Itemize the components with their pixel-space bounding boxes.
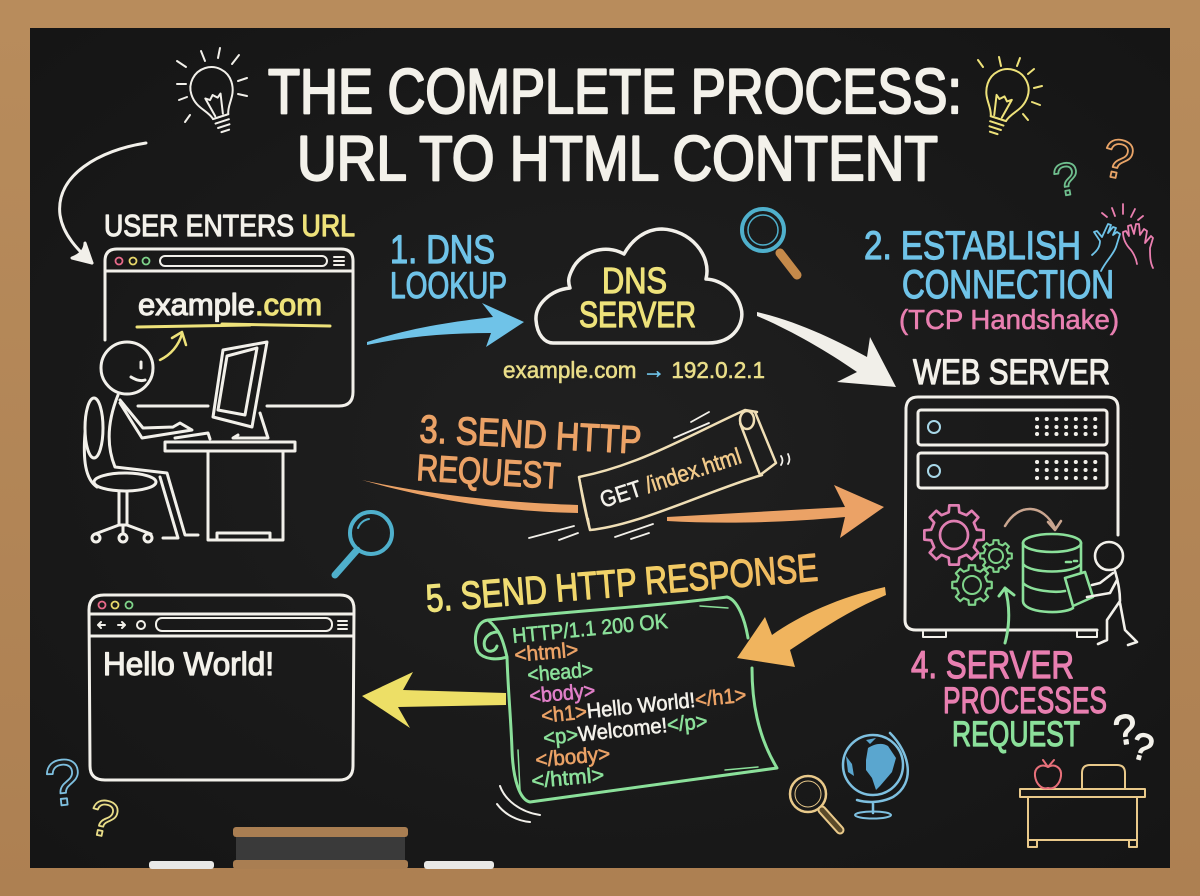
title [268, 57, 962, 194]
icon: magnifier mid [335, 512, 392, 575]
monitor [213, 342, 267, 427]
step 5 label: 5. SEND HTTP RESPONSE [424, 547, 819, 621]
question marks bottom right: ? [1110, 705, 1140, 754]
gears [924, 505, 1012, 605]
step 3 label [416, 408, 642, 497]
step 4 label [911, 644, 1107, 754]
step 1 label: LOOKUP [390, 265, 507, 306]
DNS cloud: SERVER [579, 294, 696, 335]
step 4 label: 4. SERVER [911, 644, 1074, 687]
browser address text: example.com [138, 287, 322, 322]
step 2 label: (TCP Handshake) [899, 304, 1119, 335]
question marks bottom right [1110, 705, 1158, 771]
code text [511, 610, 747, 793]
icon: globe [843, 733, 908, 818]
step 2 label: 2. ESTABLISH [864, 224, 1081, 268]
stick figure at computer [84, 342, 295, 542]
question marks bottom left: ? [84, 788, 123, 849]
step 2 label: CONNECTION [902, 263, 1114, 307]
code text: <head> [526, 658, 594, 687]
apple [1035, 766, 1061, 788]
web server tower [905, 397, 1137, 645]
step 1 label: 1. DNS [390, 228, 495, 272]
question marks top right: ? [1049, 151, 1083, 207]
heading: web server: WEB SERVER [913, 353, 1110, 392]
step 3 label: REQUEST [416, 447, 562, 497]
code text: <p>Welcome!</p> [542, 710, 709, 750]
icon: light bulb left [177, 48, 247, 137]
speed lines [529, 412, 790, 540]
DNS mapping: example.com → 192.0.2.1 [503, 357, 765, 383]
arrow: to DNS [367, 303, 524, 347]
question marks bottom left: ? [41, 744, 85, 821]
desk [165, 442, 295, 451]
arrow: pink to green curve [1005, 509, 1061, 530]
scroll: GET request [529, 410, 790, 540]
title: THE COMPLETE PROCESS: [268, 57, 962, 127]
step 4 label: PROCESSES [943, 680, 1107, 721]
code text: HTTP/1.1 200 OK [511, 610, 669, 648]
icon: high five hands [1092, 204, 1153, 271]
arrow: request right [667, 485, 884, 538]
icon: magnifier bottom [790, 776, 840, 830]
browser window: result [89, 595, 354, 780]
stick figure at server [1087, 542, 1137, 645]
question marks top right [1049, 125, 1139, 207]
arrow: yellow to browser [362, 672, 506, 728]
step 2 label [864, 224, 1119, 335]
arrow: orange from server [737, 587, 886, 667]
rack vent dots [1037, 419, 1102, 478]
arrow: white to web server [757, 312, 896, 387]
code text: <h1>Hello World!</h1> [540, 684, 747, 728]
browser window: user [105, 249, 353, 406]
chalk tray with eraser [149, 827, 494, 869]
teacher desk with apple [1020, 760, 1145, 847]
scroll text: GET /index.html [597, 443, 744, 513]
step 3 label: 3. SEND HTTP [419, 408, 642, 463]
icon: light bulb right [974, 57, 1042, 139]
arrow: request left tail [362, 480, 578, 513]
question marks top right: ? [1096, 125, 1139, 192]
question marks bottom left [41, 744, 123, 849]
scroll: HTTP response [475, 597, 777, 822]
DNS cloud [536, 229, 742, 343]
icon: magnifier top [742, 209, 797, 275]
question marks bottom right: ? [1127, 725, 1158, 771]
arrow: curved into browser [60, 143, 146, 263]
code text: <body> [528, 679, 596, 708]
DNS cloud: DNS [602, 260, 667, 301]
chair [85, 398, 103, 458]
database [1023, 534, 1093, 612]
underline and arrow [137, 324, 330, 360]
step 4 label: REQUEST [952, 715, 1080, 754]
title: URL TO HTML CONTENT [297, 124, 938, 194]
code text: </body> [534, 743, 611, 772]
code text: </html> [530, 764, 605, 793]
browser result text: Hello World! [103, 646, 274, 682]
code text: <html> [513, 638, 579, 667]
step 1 label [390, 228, 507, 306]
arrow: green up [999, 588, 1014, 643]
heading: user enters URL: USER ENTERS URL [104, 208, 355, 243]
